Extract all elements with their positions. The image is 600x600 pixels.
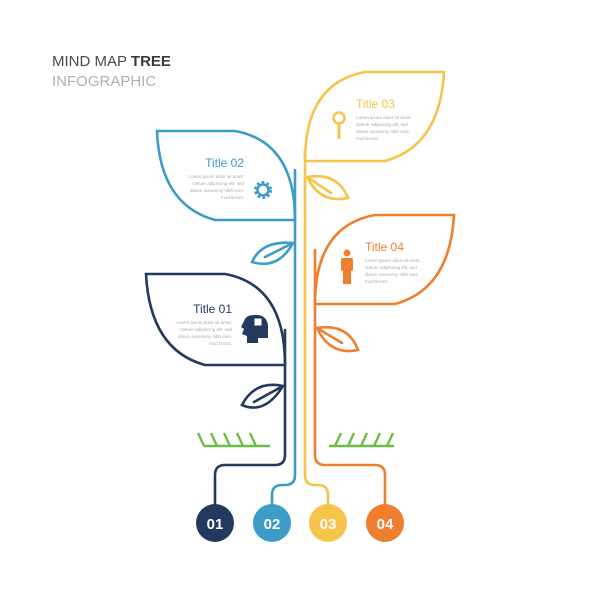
text block 03: Title 03	[356, 97, 395, 111]
branch: yellow stem and leaf 03	[305, 72, 444, 505]
text block 02: ctetuer adipiscing elit, sed	[192, 181, 244, 186]
text block 01: diaum nonummy nibh euis-	[178, 334, 232, 339]
icon: gear	[256, 183, 270, 197]
text block 04	[365, 240, 421, 284]
text block 02: Title 02	[205, 156, 244, 170]
text block 03	[356, 97, 412, 141]
text block 01	[176, 302, 232, 346]
text block 01: ctetuer adipiscing elit, sed	[180, 327, 232, 332]
number circles: 02	[264, 516, 280, 533]
branch: navy stem and leaf 01	[146, 274, 285, 505]
text block 04: Lorem ipsum dolor sit amet,	[365, 258, 421, 263]
grass right	[329, 433, 394, 446]
icon: head	[241, 315, 268, 343]
number circles: 01	[207, 516, 223, 533]
title: INFOGRAPHIC	[52, 73, 156, 90]
text block 04: diaum nonummy nibh euis-	[365, 272, 420, 277]
number circles	[196, 504, 404, 542]
icon: person	[341, 250, 353, 284]
text block 04: Title 04	[365, 240, 404, 254]
text block 04: ctetuer adipiscing elit, sed	[365, 265, 417, 270]
title	[52, 53, 171, 90]
text block 01: Title 01	[193, 302, 232, 316]
branch: blue stem and leaf 02	[157, 131, 295, 505]
text block 04: mod tincint.	[365, 279, 388, 284]
text block 02: Lorem ipsum dolor sit amet,	[188, 174, 244, 179]
text block 03: ctetuer adipiscing elit, sed	[356, 122, 408, 127]
grass left	[198, 433, 270, 446]
text block 01: mod tincint.	[209, 341, 232, 346]
text block 02: diaum nonummy nibh euis-	[190, 188, 244, 193]
text block 03: Lorem ipsum dolor sit amet,	[356, 115, 412, 120]
icon: magnifier	[334, 112, 344, 139]
text block 01: Lorem ipsum dolor sit amet,	[176, 320, 232, 325]
number circles: 04	[377, 516, 394, 533]
branch: orange stem and leaf 04	[315, 215, 454, 505]
text block 03: mod tincint.	[356, 136, 379, 141]
text block 03: diaum nonummy nibh euis-	[356, 129, 411, 134]
text block 02	[188, 156, 244, 200]
number circles: 03	[320, 516, 336, 533]
title: MIND MAP TREE	[52, 53, 171, 70]
text block 02: mod tincint.	[221, 195, 244, 200]
